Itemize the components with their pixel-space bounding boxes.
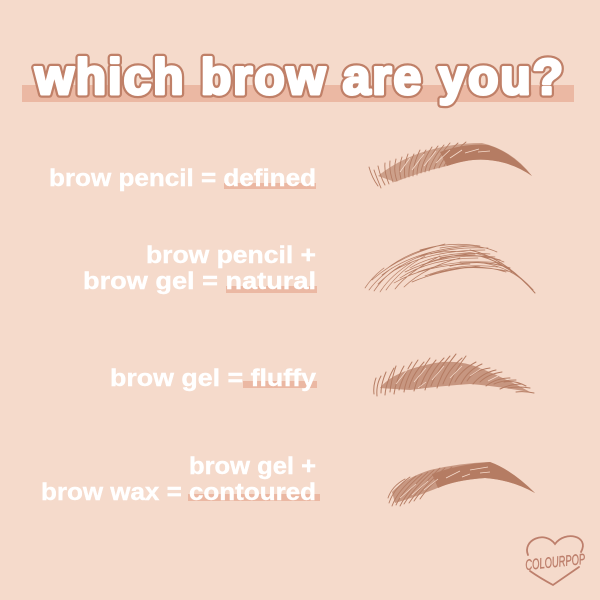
eyebrow: fluffy	[374, 354, 534, 396]
title: which brow are you?: which brow are you?	[34, 49, 563, 105]
label: brow gel + brow wax = contoured: brow gel +	[189, 453, 316, 480]
title: which brow are you?: which brow are you?	[34, 49, 563, 105]
eyebrow: defined	[369, 142, 532, 188]
eyebrow: contoured	[388, 462, 535, 506]
label: brow gel + brow wax = contoured: brow wax = contoured	[41, 479, 316, 506]
logo: ColourPop heart	[525, 536, 586, 585]
label: brow pencil + brow gel = natural: brow pencil +	[146, 242, 316, 269]
label: brow gel = fluffy: brow gel = fluffy	[110, 365, 317, 392]
label: brow pencil + brow gel = natural	[83, 242, 317, 295]
label: brow gel + brow wax = contoured	[41, 453, 320, 506]
label: brow pencil + brow gel = natural: brow gel = natural	[83, 268, 316, 295]
eyebrow: natural	[365, 244, 535, 293]
label: brow pencil = defined: brow pencil = defined	[49, 165, 316, 192]
